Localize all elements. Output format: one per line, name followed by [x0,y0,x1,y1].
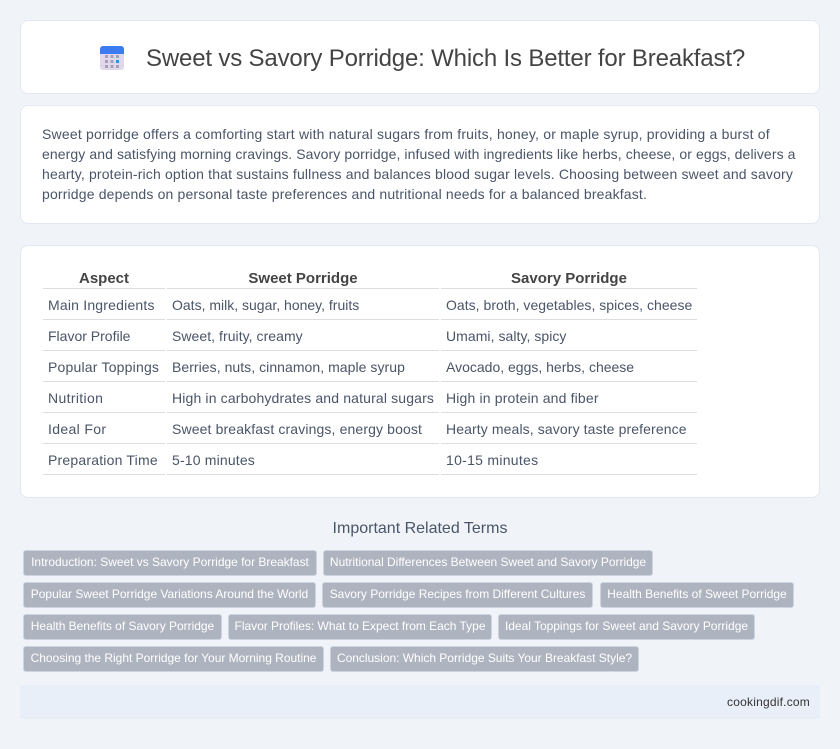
footer source: cookingdif.com [727,695,810,709]
intro text: hearty, protein-rich option that sustains fullness and balances blood sugar levels. Choosing between sweet and savory [42,166,793,182]
related term tags: Popular Sweet Porridge Variations Around the World [31,587,308,601]
comparison table: Oats, broth, vegetables, spices, cheese [446,297,692,313]
related term tags: Health Benefits of Savory Porridge [31,619,214,633]
related term tags: Choosing the Right Porridge for Your Morning Routine [31,651,316,665]
intro text: energy and satisfying morning cravings. Savory porridge, infused with ingredients like herbs, cheese, or eggs, delivers a [42,146,796,162]
comparison table: Main Ingredients [48,297,155,313]
comparison table: Preparation Time [48,452,158,468]
comparison table: Hearty meals, savory taste preference [446,421,687,437]
intro text: Sweet porridge offers a comforting start with natural sugars from fruits, honey, or maple syrup, providing a burst of [42,126,770,142]
comparison table: Ideal For [48,421,106,437]
comparison table: 5-10 minutes [172,452,255,468]
intro text: porridge depends on personal taste preferences and nutritional needs for a balanced breakfast. [42,186,647,202]
comparison table: Sweet breakfast cravings, energy boost [172,421,422,437]
comparison table: Flavor Profile [48,328,130,344]
comparison table [43,270,697,475]
panel: comparison table [20,245,820,498]
header card [20,20,820,94]
comparison table: Sweet Porridge [248,270,358,287]
related term tags: Flavor Profiles: What to Expect from Each Type [235,619,485,633]
comparison table: Umami, salty, spicy [446,328,566,344]
comparison table: Sweet, fruity, creamy [172,328,303,344]
panel: introduction [20,105,820,224]
comparison table: Avocado, eggs, herbs, cheese [446,359,634,375]
comparison table: 10-15 minutes [446,452,538,468]
related term tags: Introduction: Sweet vs Savory Porridge for Breakfast [31,555,309,569]
intro text [42,126,796,202]
comparison table: Aspect [79,270,129,287]
related term tags: Health Benefits of Sweet Porridge [607,587,787,601]
footer bar [20,685,820,719]
icon: calendar [100,46,124,70]
comparison table: Oats, milk, sugar, honey, fruits [172,297,359,313]
related term tags: Ideal Toppings for Sweet and Savory Porridge [505,619,748,633]
comparison table: Savory Porridge [511,270,627,287]
comparison table: High in carbohydrates and natural sugars [172,390,434,406]
related term tags: Savory Porridge Recipes from Different Cultures [330,587,585,601]
title: Sweet vs Savory Porridge: Which Is Better for Breakfast? [146,45,745,72]
comparison table: High in protein and fiber [446,390,599,406]
comparison table: Popular Toppings [48,359,159,375]
related term tags: Nutritional Differences Between Sweet and Savory Porridge [330,555,646,569]
heading: important related terms: Important Related Terms [333,520,507,537]
comparison table: Nutrition [48,390,103,406]
related term tags: Conclusion: Which Porridge Suits Your Breakfast Style? [337,651,632,665]
related term tags [23,550,794,672]
comparison table: Berries, nuts, cinnamon, maple syrup [172,359,405,375]
